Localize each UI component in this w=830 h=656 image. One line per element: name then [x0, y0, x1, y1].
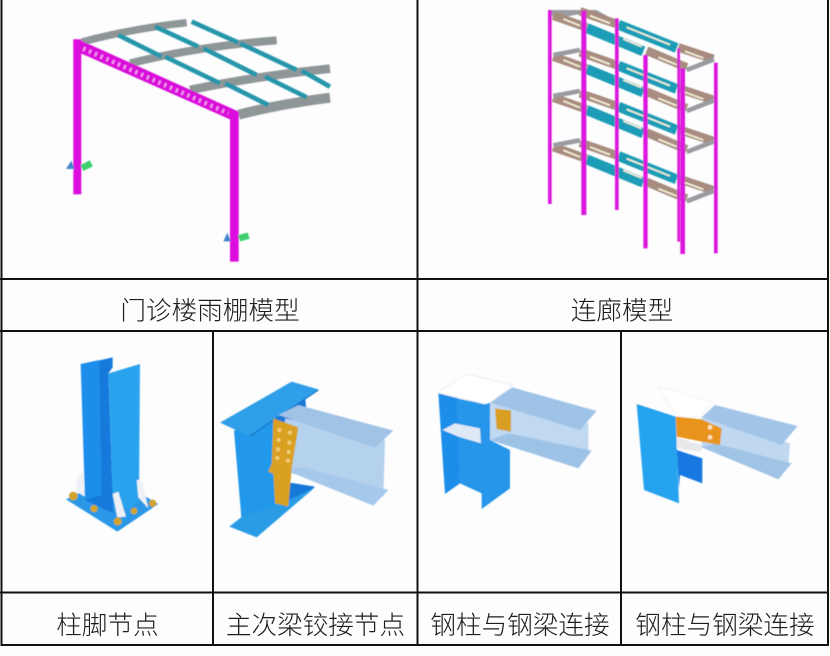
label: canopy model: 门诊楼雨棚模型 — [120, 296, 300, 326]
teal purlins — [118, 22, 330, 105]
base plate — [66, 477, 158, 532]
magenta columns — [73, 39, 81, 194]
label: hinge node: 主次梁铰接节点 — [226, 611, 405, 640]
corridor tier 2 — [553, 50, 714, 111]
panel: canopy model — [66, 22, 330, 262]
gold connection plate — [268, 418, 298, 507]
column top flange — [220, 382, 318, 437]
column flange — [438, 393, 460, 494]
panel: column base node — [66, 357, 158, 532]
label: column to beam connection, right: 钢柱与钢梁连接 — [635, 611, 815, 640]
column web — [677, 450, 702, 488]
bolts — [275, 428, 292, 463]
column web — [85, 357, 113, 513]
panel: main and secondary beam hinge node — [220, 382, 393, 537]
white stiffeners — [113, 480, 148, 517]
label: column to beam connection, left: 钢柱与钢梁连接 — [430, 611, 610, 640]
column rear shadow — [273, 480, 315, 510]
label: column base node: 柱脚节点 — [56, 611, 159, 640]
beam — [490, 403, 588, 467]
panel: steel column to beam connection, right — [637, 387, 798, 503]
column web face — [234, 417, 282, 525]
corridor tier 3 — [553, 91, 714, 152]
label: corridor model: 连廊模型 — [571, 296, 673, 326]
left flange — [81, 360, 102, 500]
panel: steel column to beam connection, left — [438, 374, 597, 509]
secondary beam — [285, 418, 385, 497]
grey cross beams — [82, 23, 330, 115]
stiffener — [442, 423, 481, 443]
white stiffener behind — [76, 473, 85, 497]
beam — [702, 417, 790, 467]
anchor bolts — [69, 492, 156, 525]
gold plate — [495, 408, 511, 432]
column lower flange — [229, 487, 315, 537]
stiffener — [677, 437, 702, 452]
panel: corridor model — [548, 10, 718, 254]
orange curved plate — [676, 417, 722, 445]
axis markers — [66, 161, 249, 241]
right flange — [108, 364, 140, 510]
magenta corridor columns — [548, 10, 718, 254]
white top plate — [658, 387, 712, 417]
column flange — [637, 404, 679, 503]
corridor tier 1 — [550, 10, 714, 70]
white top plate — [438, 374, 512, 405]
magenta main beam — [73, 39, 239, 119]
column web and far flange — [457, 398, 510, 509]
corridor tier 4 — [553, 140, 714, 201]
